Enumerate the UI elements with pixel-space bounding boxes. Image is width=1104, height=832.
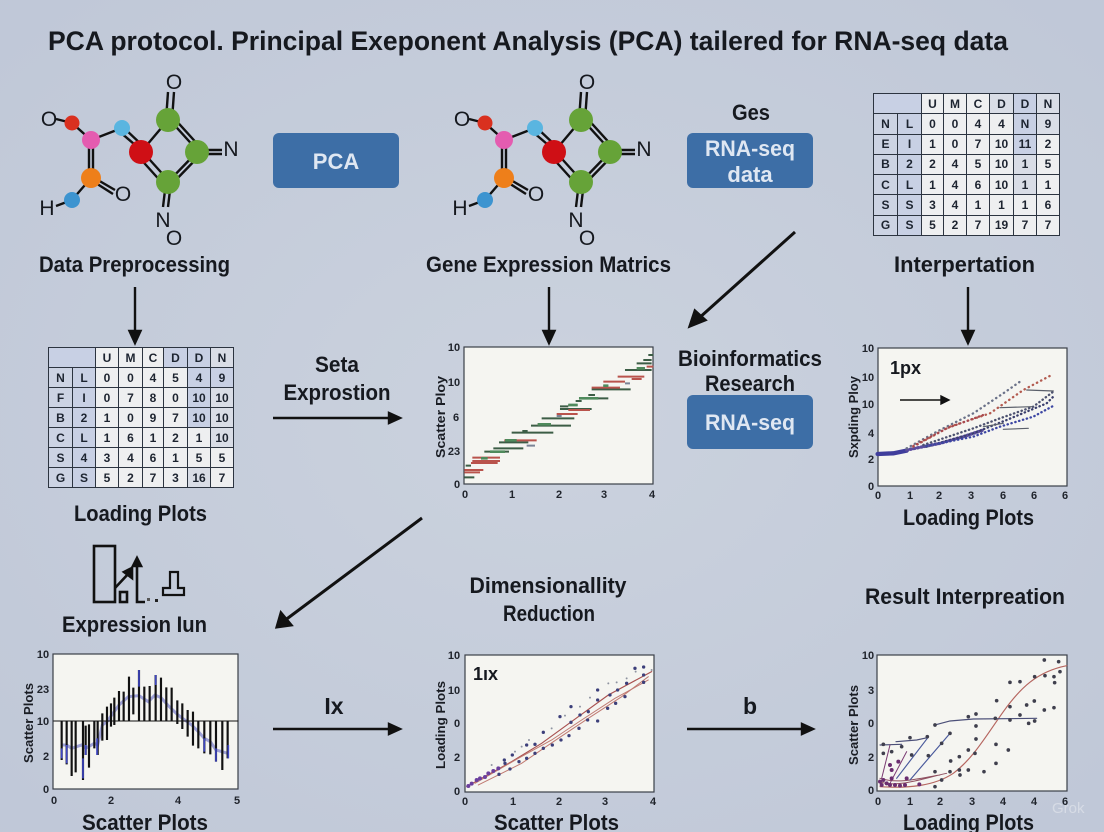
table: left: 5 <box>196 450 202 464</box>
table: left: 1 <box>196 430 202 444</box>
icon: molecule centre: O <box>528 183 544 206</box>
icon: molecule left: O <box>41 108 57 131</box>
table: left: 4 <box>127 450 134 464</box>
table: left: C <box>56 430 65 444</box>
icon: molecule centre: O <box>579 71 595 94</box>
table: top right: G <box>881 218 890 232</box>
chart: bar scatter plot <box>21 649 240 807</box>
chart: scatter ploy: 10 <box>448 342 460 354</box>
label: Loading Plots (table): Loading Plots <box>74 501 207 526</box>
icon: molecule left: N <box>223 138 239 161</box>
table: left: 10 <box>215 410 229 424</box>
label: Ix: Ix <box>324 693 344 719</box>
table: left: 0 <box>104 370 110 384</box>
label: Expression Iun: Expression Iun <box>62 612 207 637</box>
icon: molecule centre <box>452 71 652 250</box>
table: left: 4 <box>150 370 156 384</box>
table: top right: I <box>908 137 911 151</box>
chart: bar scatter plot: 10 <box>37 716 49 728</box>
icon: bars and arrows <box>94 546 184 602</box>
table: left: 7 <box>172 410 179 424</box>
icon: molecule centre: N <box>636 138 652 161</box>
chart: scatter ploy: 1 <box>509 489 515 501</box>
button: PCA: PCA <box>313 149 359 174</box>
chart: sxpding ploy <box>846 343 1068 502</box>
label: Bioinformatics Research: Research <box>705 371 795 396</box>
chart: scatter ploy: 6 <box>453 412 459 424</box>
button: RNA-seq data: RNA-seq <box>705 136 795 161</box>
table: left: 7 <box>127 390 134 404</box>
chart: bar scatter plot: 4 <box>175 795 182 807</box>
chart: scatter plots right: 0 <box>868 718 874 730</box>
table: left: 10 <box>192 410 206 424</box>
chart: sxpding ploy: 1px <box>890 358 921 378</box>
table: left: C <box>149 350 157 364</box>
table: left: 0 <box>127 410 134 424</box>
table: top right: 3 <box>929 198 936 212</box>
chart: loading plots: 0 <box>462 796 468 808</box>
chart: scatter ploy <box>433 342 656 501</box>
chart: scatter plots right: 2 <box>868 752 874 764</box>
table: top right: 6 <box>975 178 981 192</box>
chart: sxpding ploy: 10 <box>862 343 874 355</box>
chart: loading plots: 0 <box>454 718 460 730</box>
table: top right: 7 <box>975 218 981 232</box>
table: top right: 1 <box>1022 157 1028 171</box>
chart: bar scatter plot: 10 <box>37 649 49 661</box>
chart: loading plots: 10 <box>448 650 460 662</box>
table: top right: 2 <box>929 157 936 171</box>
chart: loading plots: 4 <box>650 796 657 808</box>
icon: molecule centre: H <box>452 197 468 220</box>
table: top right: 2 <box>906 157 913 171</box>
chart: sxpding ploy: 10 <box>862 399 874 411</box>
chart: sxpding ploy: 6 <box>1000 490 1006 502</box>
icon: molecule centre: O <box>579 227 595 250</box>
chart: scatter ploy: 4 <box>649 489 656 501</box>
arrow: to final plot <box>687 724 813 734</box>
table: top right: 6 <box>1045 198 1051 212</box>
table: top right: N <box>881 117 890 131</box>
table: left: D <box>171 350 180 364</box>
table: top right: 2 <box>952 218 958 232</box>
table: top right: S <box>881 198 890 212</box>
arrow: interpretation down <box>962 287 974 343</box>
icon: molecule centre: N <box>568 209 584 232</box>
table: top right: L <box>906 178 913 192</box>
label: Interpertation: Interpertation <box>894 252 1035 277</box>
table: top right: 2 <box>1045 137 1051 151</box>
icon: molecule left: O <box>166 227 182 250</box>
chart: scatter ploy: Scatter Ploy <box>433 375 448 458</box>
chart: sxpding ploy: 6 <box>1062 490 1068 502</box>
table: top right: L <box>906 117 913 131</box>
icon: molecule centre: O <box>454 108 470 131</box>
chart: loading plots: 1ıx <box>473 664 498 684</box>
chart: sxpding ploy: 0 <box>868 481 874 493</box>
chart: scatter plots right: 4 <box>1000 796 1007 808</box>
chart: sxpding ploy: 4 <box>868 428 875 440</box>
title: PCA protocol. Principal Exeponent Analysis (PCA) tailered for RNA-seq data <box>48 26 1009 56</box>
table: left: L <box>80 370 88 384</box>
table: left: 1 <box>150 430 156 444</box>
chart: scatter plots right: 0 <box>875 796 881 808</box>
table: left: 0 <box>172 390 179 404</box>
table: top right: 4 <box>952 157 958 171</box>
table: top right: D <box>1021 97 1029 111</box>
table: left: 7 <box>150 470 156 484</box>
icon: molecule left <box>39 71 239 250</box>
chart: bar scatter plot: 23 <box>37 684 49 696</box>
table: left: N <box>56 370 65 384</box>
table: top right: E <box>881 137 890 151</box>
chart: bar scatter plot: 0 <box>43 784 49 796</box>
button: RNA-seq data <box>687 133 813 188</box>
chart: sxpding ploy: 6 <box>1031 490 1037 502</box>
table: top right: 5 <box>1045 157 1051 171</box>
arrow: to loading plot <box>273 724 400 734</box>
table: top right: U <box>928 97 937 111</box>
table: left: 7 <box>219 470 225 484</box>
chart: sxpding ploy: 0 <box>875 490 881 502</box>
chart: scatter plots right: 2 <box>937 796 943 808</box>
button: RNA-seq: RNA-seq <box>705 410 795 435</box>
label: Ges: Ges <box>732 100 770 125</box>
table: left: S <box>56 450 64 464</box>
chart: scatter plots right: 6 <box>1062 796 1068 808</box>
table: left: G <box>56 470 65 484</box>
table: left: 1 <box>104 410 110 424</box>
chart: scatter ploy: 2 <box>556 489 562 501</box>
chart: scatter ploy: 0 <box>462 489 468 501</box>
table: top right: 10 <box>995 157 1008 171</box>
chart: sxpding ploy: 3 <box>968 490 974 502</box>
chart: scatter plots right: 1 <box>907 796 913 808</box>
table: top right: 4 <box>975 117 981 131</box>
table: left: 2 <box>127 470 134 484</box>
table: top right: 1 <box>1022 198 1028 212</box>
chart: scatter ploy: 0 <box>454 479 460 491</box>
table: left: D <box>195 350 203 364</box>
chart: sxpding ploy: 2 <box>868 454 874 466</box>
table: top right: 4 <box>952 178 958 192</box>
table: left: M <box>126 350 136 364</box>
table: top right: N <box>1044 97 1052 111</box>
table: left: N <box>218 350 226 364</box>
table: left: 6 <box>127 430 134 444</box>
label: Bioinformatics Research: Bioinformatics <box>678 346 822 371</box>
label: Seta Exprostion: Seta <box>315 352 360 377</box>
arrow: matrix down <box>544 287 554 343</box>
icon: molecule left: H <box>39 197 55 220</box>
table: top right: 10 <box>995 137 1008 151</box>
table: top right: 0 <box>952 117 958 131</box>
watermark: Grok <box>1052 800 1085 817</box>
arrow: to scatter <box>273 413 400 423</box>
label: Bioinformatics Research <box>678 346 822 396</box>
chart: scatter plots right <box>846 650 1068 808</box>
table: left: 4 <box>196 370 202 384</box>
table: top right: 4 <box>952 198 958 212</box>
table: left <box>48 347 234 488</box>
chart: scatter plots right: 0 <box>868 785 874 797</box>
chart: scatter plots right: 3 <box>969 796 975 808</box>
table: top right: S <box>905 198 914 212</box>
table: top right: 1 <box>975 198 981 212</box>
table: top right: 7 <box>1022 218 1028 232</box>
table: left: 9 <box>219 370 225 384</box>
label: Gene Expression Matrics: Gene Expression Matrics <box>426 252 671 277</box>
table: left: 6 <box>150 450 156 464</box>
table: left: 3 <box>172 470 179 484</box>
arrow: preprocessing down <box>130 287 140 343</box>
icon: molecule left: O <box>115 183 131 206</box>
table: left: B <box>56 410 65 424</box>
chart: sxpding ploy: 10 <box>862 372 874 384</box>
chart: loading plots: 3 <box>602 796 608 808</box>
table: left: 9 <box>150 410 156 424</box>
table: top right: 4 <box>998 117 1005 131</box>
table: left: 0 <box>104 390 110 404</box>
label: Dimensionallity Reduction: Reduction <box>503 601 595 626</box>
table: top right: 19 <box>995 218 1008 232</box>
table: left: 2 <box>172 430 179 444</box>
table: left: 5 <box>172 370 179 384</box>
table: left: 10 <box>192 390 206 404</box>
chart: sxpding ploy: Sxpding Ploy <box>846 375 861 458</box>
table: left: 5 <box>219 450 225 464</box>
icon: molecule left: N <box>155 209 171 232</box>
arrow: diagonal to bar chart <box>277 518 422 627</box>
table: left: S <box>80 470 88 484</box>
icon: molecule left: O <box>166 71 182 94</box>
table: top right: C <box>974 97 982 111</box>
label: b: b <box>743 693 757 719</box>
chart: scatter plots right: 3 <box>868 685 874 697</box>
chart: loading plots: 1 <box>510 796 516 808</box>
label: Loading Plots (right): Loading Plots <box>903 505 1034 530</box>
button: PCA <box>273 133 399 188</box>
chart: scatter ploy: 3 <box>601 489 607 501</box>
label: Seta Exprostion: Exprostion <box>284 380 390 405</box>
table: top right: 0 <box>929 117 936 131</box>
table: left: 4 <box>81 450 87 464</box>
chart: bar scatter plot: Scatter Plots <box>21 683 36 763</box>
table: top right: 5 <box>975 157 981 171</box>
table: top right: 0 <box>952 137 958 151</box>
chart: scatter ploy: 23 <box>448 446 460 458</box>
table: left: 8 <box>150 390 156 404</box>
chart: loading plots <box>433 650 657 808</box>
table: left: 5 <box>104 470 110 484</box>
table: left: 10 <box>215 390 229 404</box>
chart: scatter plots right: Scatter Plots <box>846 685 861 765</box>
table: top right: 1 <box>929 178 936 192</box>
table: top right: N <box>1021 117 1029 131</box>
table: top right: B <box>881 157 890 171</box>
table: top right <box>873 93 1060 236</box>
label: Seta Exprostion <box>284 352 390 405</box>
table: left: 3 <box>104 450 110 464</box>
table: top right: 7 <box>1045 218 1051 232</box>
table: top right: 11 <box>1019 137 1031 151</box>
button: RNA-seq data: data <box>727 162 773 187</box>
table: top right: 1 <box>998 198 1005 212</box>
table: top right: 10 <box>995 178 1008 192</box>
table: left: L <box>80 430 88 444</box>
label: Dimensionallity Reduction <box>470 573 627 626</box>
chart: loading plots: Loading Plots <box>433 681 448 769</box>
table: left: I <box>82 390 86 404</box>
chart: bar scatter plot: 0 <box>51 795 57 807</box>
table: top right: 7 <box>975 137 981 151</box>
table: top right: 5 <box>929 218 936 232</box>
table: left: U <box>103 350 111 364</box>
label: Data Preprocessing: Data Preprocessing <box>39 252 230 277</box>
label: Dimensionallity Reduction: Dimensionallity <box>470 573 627 598</box>
table: top right: 1 <box>1022 178 1028 192</box>
chart: bar scatter plot: 2 <box>43 751 49 763</box>
table: left: 2 <box>81 410 87 424</box>
chart: loading plots: 0 <box>454 786 460 798</box>
button: RNA-seq <box>687 395 813 449</box>
chart: scatter plots right: 4 <box>1031 796 1038 808</box>
chart: bar scatter plot: 5 <box>234 795 240 807</box>
table: left: 16 <box>192 470 206 484</box>
table: top right: 1 <box>1045 178 1051 192</box>
table: top right: D <box>997 97 1006 111</box>
table: left: 1 <box>172 450 179 464</box>
chart: bar scatter plot: 2 <box>108 795 114 807</box>
chart: sxpding ploy: 2 <box>936 490 942 502</box>
chart: scatter ploy: 10 <box>448 377 460 389</box>
table: left: 10 <box>215 430 229 444</box>
chart: sxpding ploy: 1 <box>907 490 913 502</box>
chart: loading plots: 10 <box>448 685 460 697</box>
chart: loading plots: 2 <box>556 796 562 808</box>
chart: loading plots: 2 <box>454 752 460 764</box>
chart: scatter plots right: 10 <box>862 650 874 662</box>
table: top right: 1 <box>929 137 936 151</box>
table: left: 0 <box>127 370 134 384</box>
table: top right: S <box>905 218 914 232</box>
arrow: diagonal to scatter <box>690 232 795 326</box>
table: top right: 9 <box>1045 117 1051 131</box>
table: top right: C <box>881 178 890 192</box>
label: Result Interpreation: Result Interpreation <box>865 584 1065 609</box>
table: top right: M <box>950 97 960 111</box>
table: left: 1 <box>104 430 110 444</box>
table: left: F <box>57 390 64 404</box>
